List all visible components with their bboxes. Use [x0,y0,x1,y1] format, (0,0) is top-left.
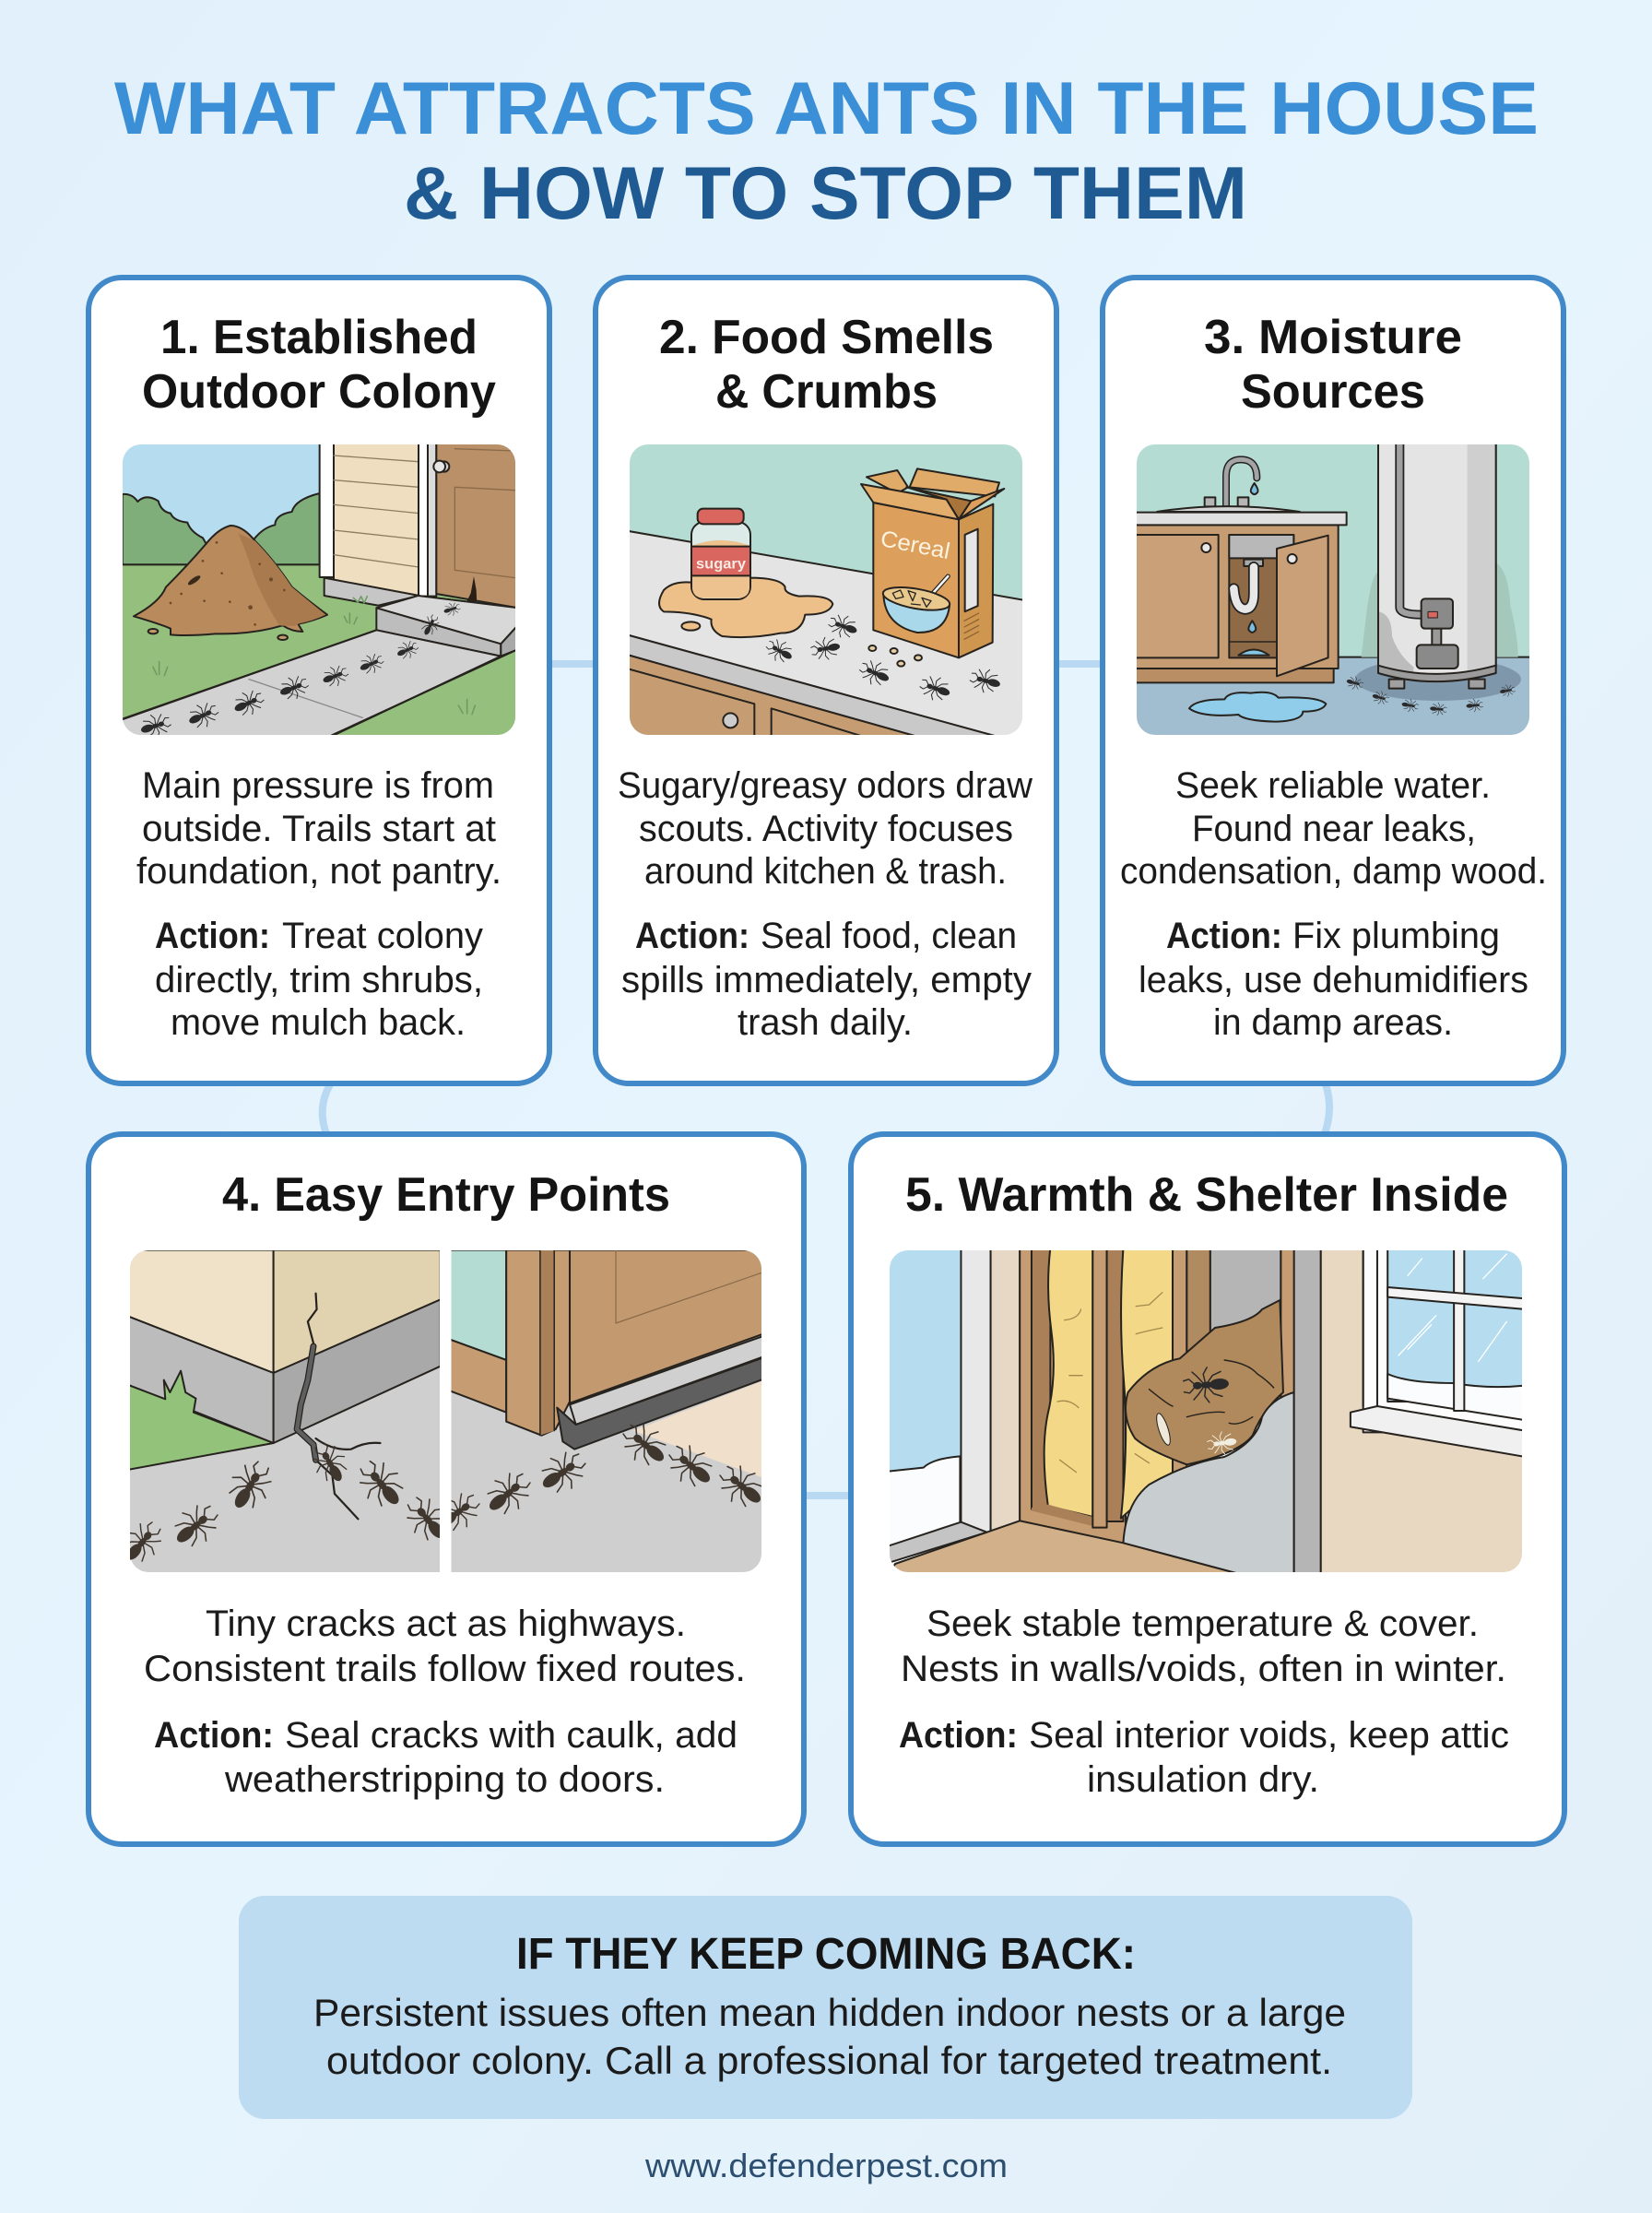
description 3 [1120,765,1547,892]
ants near heater [1345,675,1516,716]
description 1: outside. Trails start at [142,809,496,849]
description 4: Consistent trails follow fixed routes. [144,1649,746,1689]
action 5: Action: [899,1715,1018,1756]
description 5: Seek stable temperature & cover. [926,1604,1479,1644]
title: & HOW TO STOP THEM [404,152,1247,235]
action 5 [899,1715,1509,1800]
floor and baseboard [888,1521,1238,1577]
heading 1: Outdoor Colony [142,365,496,419]
grey column and beige wall [1294,1248,1528,1574]
action 4: Seal cracks with caulk, add [285,1715,738,1756]
snowy window [1351,1248,1528,1457]
illustration: kitchen counter [627,444,1023,736]
heading 2: & Crumbs [715,365,938,419]
action 2: trash daily. [738,1002,913,1043]
sink cabinet [1134,459,1347,682]
description 3: condensation, damp wood. [1120,851,1547,892]
drywall [1123,1392,1294,1574]
description 4: Tiny cracks act as highways. [206,1604,686,1644]
action 5: insulation dry. [1087,1759,1319,1800]
sugary jar [691,509,750,599]
white gap [440,1250,452,1572]
action 4 [154,1715,738,1800]
description 2: scouts. Activity focuses [639,809,1013,849]
heading 2 [659,311,994,419]
heading 1 [142,311,496,419]
action 5: Seal interior voids, keep attic [1029,1715,1509,1756]
heading 4: 4. Easy Entry Points [222,1168,670,1222]
ant mound [134,526,327,640]
action 2 [621,916,1032,1043]
cereal box [861,468,1004,657]
heading 5: 5. Warmth & Shelter Inside [905,1168,1508,1222]
callout: if they keep coming back [239,1896,1412,2119]
action 2: Action: [635,916,749,956]
illustration: nest in wall void [888,1248,1528,1577]
action 3: Action: [1166,916,1282,956]
heading 1: 1. Established [160,311,478,364]
heading 3: 3. Moisture [1204,311,1462,364]
puddle [1189,692,1326,722]
action 2: spills immediately, empty [621,960,1032,1000]
action 3: leaks, use dehumidifiers [1139,960,1528,1000]
description 2: Sugary/greasy odors draw [618,765,1032,806]
door sweep scene [450,1250,765,1573]
action 1: move mulch back. [171,1002,466,1043]
ants on counter [762,611,1003,704]
callout heading: IF THEY KEEP COMING BACK: [516,1930,1136,1979]
connectors between cards [323,664,1329,1496]
heading 2: 2. Food Smells [659,311,994,364]
description 1: foundation, not pantry. [136,851,502,892]
description 5: Nests in walls/voids, often in winter. [901,1649,1506,1689]
sugary jar: sugary [696,557,747,573]
action 3: Fix plumbing [1292,916,1500,956]
action 1: directly, trim shrubs, [155,960,483,1000]
ant nest [1126,1300,1283,1464]
action 3 [1139,916,1528,1043]
action 4: Action: [154,1715,274,1756]
illustration: foundation crack and door gap [127,1250,765,1573]
heading 3: Sources [1241,365,1425,419]
description 5 [901,1604,1506,1689]
wall studs and insulation [961,1248,1295,1544]
description 3: Seek reliable water. [1175,765,1491,806]
panel: 4. easy entry points [88,1134,804,1844]
description 2: around kitchen & trash. [644,851,1007,892]
ant trails [130,1424,761,1562]
syrup spill [659,578,832,637]
panel: 3. moisture sources [1103,278,1564,1083]
callout text [313,1991,1346,2082]
action 3: in damp areas. [1213,1002,1453,1043]
action 1: Treat colony [282,916,483,956]
action 1: Action: [155,916,270,956]
house siding and door [320,443,516,608]
action 1 [155,916,483,1043]
callout text: Persistent issues often mean hidden indoor nests or a large [313,1991,1346,2034]
illustration: ant mound by house [120,443,516,741]
water heater [1378,443,1496,689]
action 4: weatherstripping to doors. [224,1759,665,1800]
description 2 [618,765,1032,892]
cabinet [627,655,915,736]
action 2: Seal food, clean [761,916,1017,956]
panel: 2. food smells and crumbs [596,278,1056,1083]
description 1: Main pressure is from [142,765,494,806]
foundation and step [324,578,516,657]
description 1 [136,765,502,892]
walkway [122,630,501,736]
illustration: sink and water heater [1134,443,1530,737]
title [114,67,1539,235]
panel: 1. established outdoor colony [88,278,549,1083]
foundation crack scene [127,1250,441,1573]
black and white ants in nest [1154,1366,1238,1456]
callout text: outdoor colony. Call a professional for targeted treatment. [326,2039,1332,2082]
title: WHAT ATTRACTS ANTS IN THE HOUSE [114,67,1539,150]
website url: www.defenderpest.com [644,2147,1008,2184]
ant trail [137,600,462,741]
crumbs [868,645,922,667]
cereal box: Cereal [879,527,952,564]
panel: 5. warmth and shelter inside [851,1134,1564,1844]
description 4 [144,1604,746,1689]
heading 3 [1204,311,1462,419]
description 3: Found near leaks, [1192,809,1476,849]
